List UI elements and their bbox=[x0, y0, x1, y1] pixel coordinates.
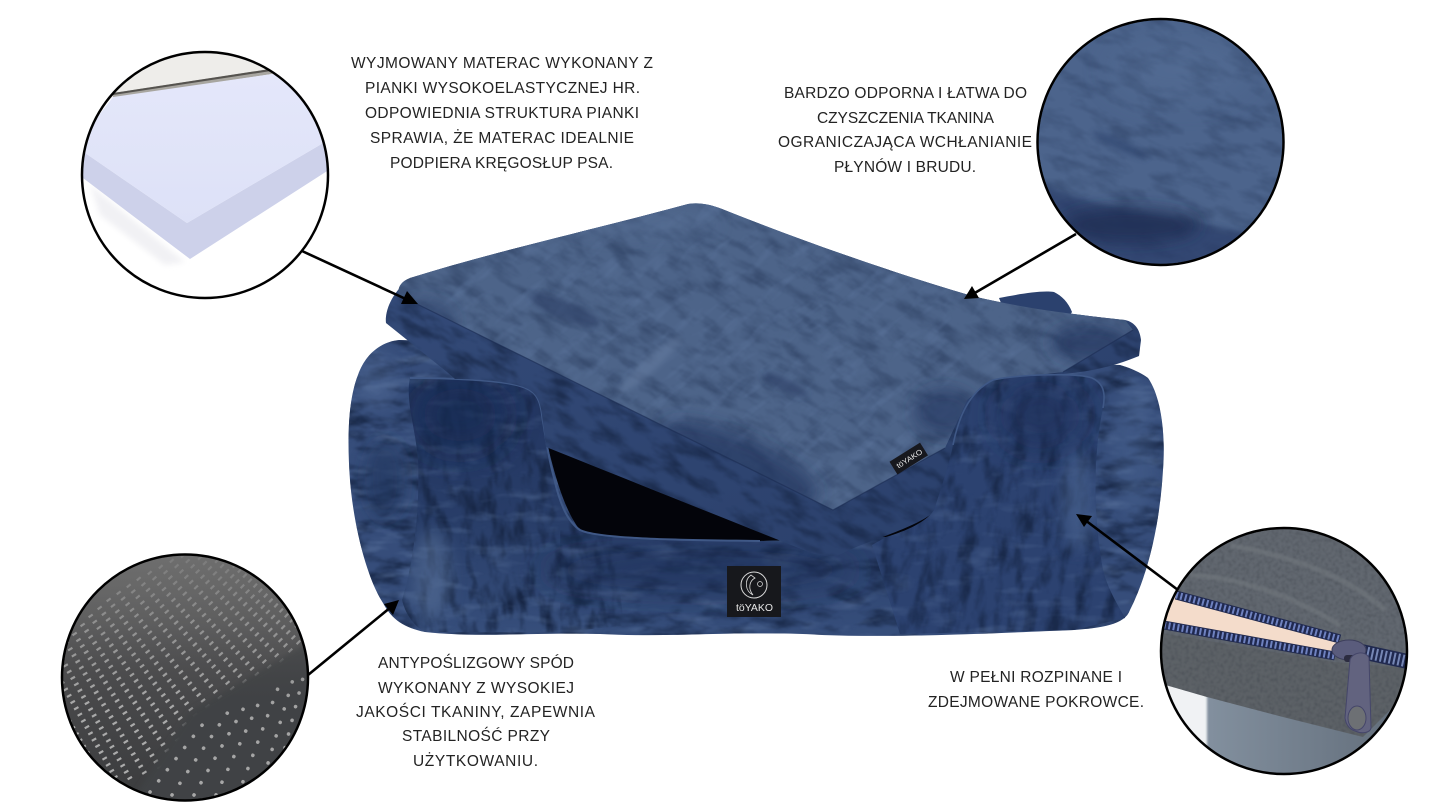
soft floor shadow bbox=[94, 192, 180, 264]
text: fabric description: OGRANICZAJĄCA WCHŁANIANIE bbox=[778, 134, 1032, 151]
text: fabric description bbox=[778, 85, 1032, 176]
right wall piping bbox=[953, 375, 1104, 445]
text: fabric description: CZYSZCZENIA TKANINA bbox=[817, 110, 995, 127]
detail circle: zipper bbox=[1155, 520, 1415, 780]
front wall and left side wall bbox=[402, 379, 886, 634]
bed back and outer body bbox=[340, 330, 1180, 640]
arrow: foam mattress callout bbox=[302, 251, 418, 304]
lower fur edge bbox=[1155, 632, 1410, 737]
peach foam band bbox=[1164, 594, 1340, 655]
fur ridges bbox=[1190, 545, 1385, 625]
text: underside description: STABILNOŚĆ PRZY bbox=[402, 727, 550, 745]
front logo tag: töYAKO bbox=[736, 603, 773, 614]
zipper pull bbox=[1332, 640, 1371, 733]
text: fabric description: PŁYNÓW I BRUDU. bbox=[834, 159, 976, 176]
arrow: zipper callout bbox=[1076, 514, 1178, 590]
text: zipper description bbox=[928, 669, 1144, 711]
dark bed interior bbox=[538, 400, 960, 541]
mattress label bbox=[889, 443, 928, 474]
text: zipper description: ZDEJMOWANE POKROWCE. bbox=[928, 694, 1144, 711]
text: foam mattress description: PIANKI WYSOKOELASTYCZNEJ HR. bbox=[365, 80, 640, 97]
foam side face bbox=[83, 144, 327, 259]
white cover behind foam bbox=[110, 53, 272, 98]
text: foam mattress description: ODPOWIEDNIA STRUKTURA PIANKI bbox=[365, 105, 639, 122]
arrow: fabric callout bbox=[964, 234, 1076, 299]
text: foam mattress description: WYJMOWANY MATERAC WYKONANY Z bbox=[351, 55, 653, 72]
text: foam mattress description bbox=[351, 55, 653, 172]
corner dots bbox=[148, 678, 304, 797]
text: underside description: UŻYTKOWANIU. bbox=[413, 752, 538, 770]
mattress label: töYAKO bbox=[895, 447, 924, 470]
mattress bbox=[386, 203, 1141, 552]
front wall piping bbox=[410, 378, 760, 541]
text: underside description: JAKOŚCI TKANINY, ZAPEWNIA bbox=[356, 703, 596, 721]
dark corner panel bbox=[144, 644, 307, 799]
text: underside description: WYKONANY Z WYSOKIEJ bbox=[378, 680, 574, 697]
text: fabric description: BARDZO ODPORNA I ŁATWA DO bbox=[784, 85, 1027, 102]
text: underside description: ANTYPOŚLIZGOWY SPÓD bbox=[378, 654, 574, 672]
anti-slip dot rows bbox=[63, 556, 301, 780]
back handle loop bbox=[999, 292, 1072, 330]
blurred background below cover bbox=[1206, 697, 1390, 773]
detail circle: anti-slip underside bbox=[60, 553, 310, 802]
text: foam mattress description: SPRAWIA, ŻE MATERAC IDEALNIE bbox=[370, 129, 634, 147]
detail circle: upholstery fabric bbox=[1036, 18, 1285, 266]
foam top face bbox=[85, 74, 322, 223]
mattress seam bbox=[399, 296, 1133, 510]
text: underside description bbox=[356, 654, 596, 770]
mattress side bbox=[386, 203, 1141, 552]
detail circle: foam mattress bbox=[75, 50, 340, 298]
right side wall bbox=[872, 376, 1125, 634]
arrow: underside callout bbox=[308, 600, 399, 675]
mattress top face bbox=[398, 203, 1133, 510]
front logo tag bbox=[727, 566, 781, 617]
text: zipper description: W PEŁNI ROZPINANE I bbox=[950, 669, 1122, 686]
zipper teeth bbox=[1176, 595, 1340, 639]
text: foam mattress description: PODPIERA KRĘGOSŁUP PSA. bbox=[390, 155, 613, 172]
product: dog bed with mattress bbox=[348, 203, 1164, 636]
